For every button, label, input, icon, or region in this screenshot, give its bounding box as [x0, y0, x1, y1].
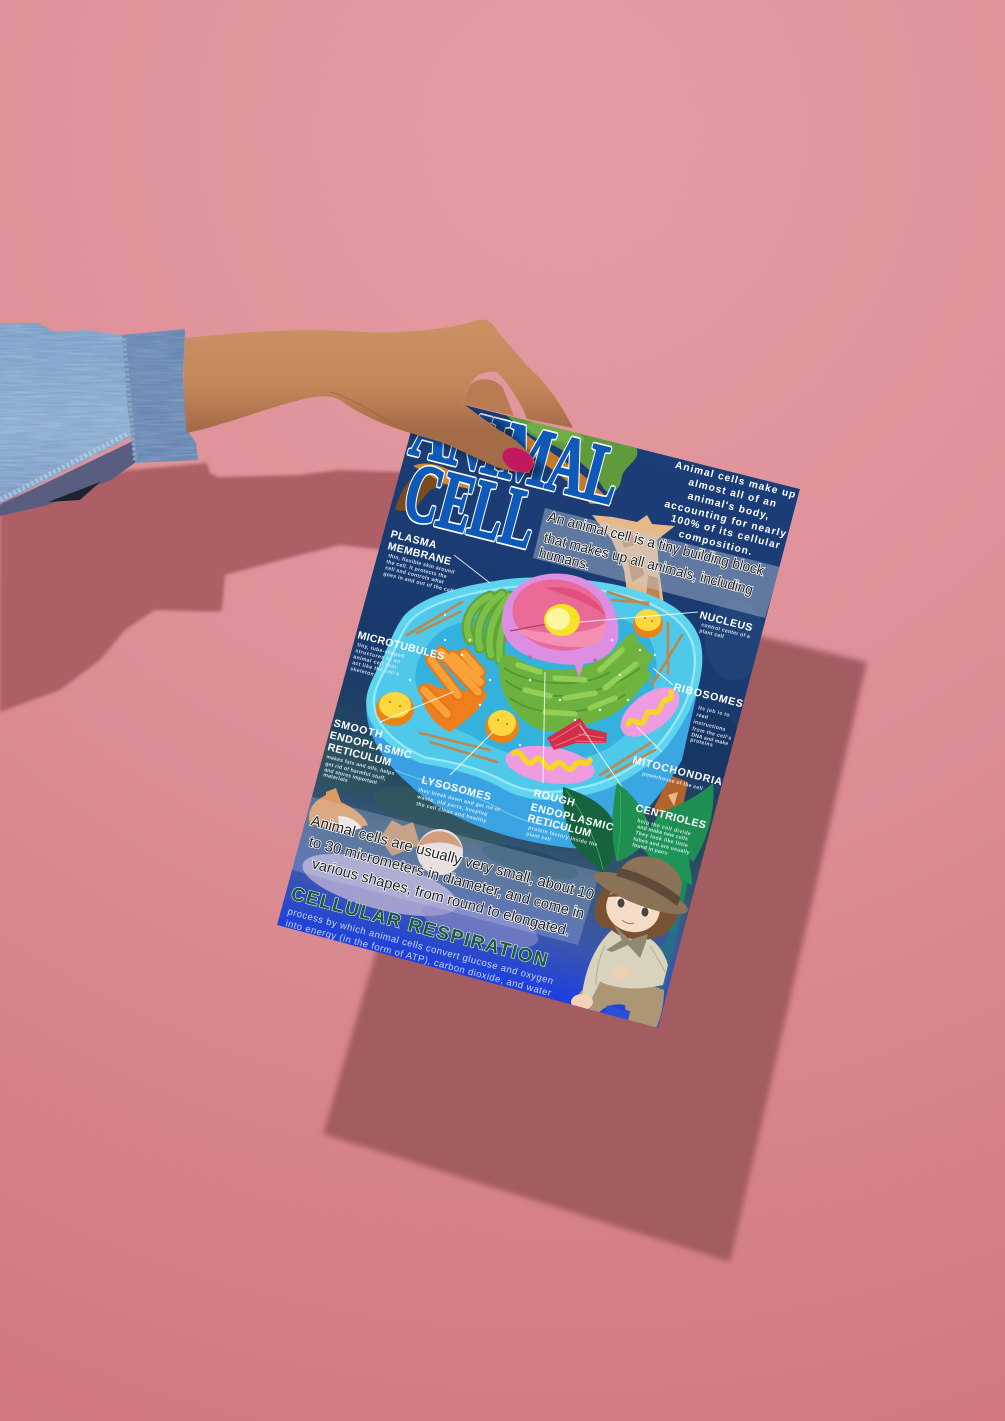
- microtubules: [407, 592, 682, 777]
- title word: animal: ANIMAL: [403, 382, 631, 522]
- big foreground leaves: [563, 783, 692, 885]
- cellular respiration description: process by which animal cells convert glucose and oxygen: [286, 906, 554, 987]
- label: ribosomes: [672, 681, 744, 749]
- label: plasma membrane: [382, 528, 455, 595]
- label: smooth endoplasmic reticulum: SMOOTH: [332, 717, 384, 741]
- label: rough endoplasmic reticulum: protein factory inside the: [527, 825, 598, 848]
- cytoplasm inner zone: [415, 609, 656, 760]
- mouth: [622, 920, 634, 924]
- hair: [595, 872, 679, 940]
- label: ribosomes: proteins: [689, 737, 713, 749]
- label: centrioles: They look like little: [634, 830, 689, 849]
- cell cytoplasm: [374, 586, 695, 792]
- label: rough endoplasmic reticulum: ROUGH: [532, 787, 576, 809]
- title word: animal: ANIMAL: [403, 382, 631, 522]
- title word: cell: CELL: [395, 445, 547, 566]
- title word: cell: CELL: [395, 445, 547, 566]
- hand shadow on title: [410, 410, 546, 481]
- cell body: [366, 577, 702, 848]
- text: animal cells make up: composition.: [677, 529, 754, 558]
- mitochondria: [506, 687, 680, 784]
- arm and thumb: [184, 320, 573, 473]
- title word: animal: [406, 413, 616, 506]
- fingernail: [498, 443, 538, 477]
- label: rough endoplasmic reticulum: RETICULUM: [526, 812, 593, 840]
- label: centrioles: tubes and are usually: [632, 836, 690, 856]
- label: mitochondria: MITOCHONDRIA: [631, 754, 724, 789]
- label: mitochondria: powerhouse of the cell: [641, 771, 704, 792]
- cell top surface rim: [366, 577, 702, 800]
- label: centrioles: and make new cells: [636, 824, 689, 843]
- label: smooth endoplasmic reticulum: RETICULUM: [326, 741, 393, 769]
- label: rough endoplasmic reticulum: ENDOPLASMIC: [529, 801, 615, 834]
- text: animal cells make up: [663, 460, 798, 558]
- label: ribosomes: DNA and make: [690, 732, 729, 747]
- label: centrioles: CENTRIOLES: [634, 802, 707, 832]
- text: animal cells make up: almost all of an: [687, 477, 778, 510]
- label: plasma membrane: thin, flexible skin around: [387, 553, 455, 576]
- label: smooth endoplasmic reticulum: [322, 717, 413, 786]
- hat crown: [620, 856, 682, 902]
- nucleus: [502, 571, 618, 678]
- label: lysosomes: LYSOSOMES: [420, 774, 492, 803]
- intro text: that makes up all animals, including: [542, 530, 755, 599]
- label: lysosomes: they break down and get rid of: [417, 787, 501, 814]
- tree with green canopy: [395, 414, 637, 512]
- label: microtubules: MICROTUBULES: [356, 629, 446, 663]
- label: plasma membrane: the cell. It protects the: [385, 559, 447, 580]
- girl explorer: [571, 856, 692, 1035]
- middle finger: [462, 379, 514, 416]
- intro text: An animal cell is a tiny building block: [546, 509, 766, 579]
- hat brim: [590, 864, 692, 922]
- lower body text: Animal cells are usually very small, about 10: [309, 812, 596, 904]
- label: lysosomes: the cell clean and healthy: [415, 801, 487, 825]
- label: ribosomes: from the cell's: [691, 726, 732, 742]
- arm shadow: [0, 463, 420, 712]
- intro text: humans.: [537, 545, 592, 574]
- giraffe: [592, 515, 675, 605]
- label: rough endoplasmic reticulum: [525, 787, 615, 848]
- neckerchief: [606, 925, 648, 958]
- rabbit: [309, 788, 368, 832]
- face: [601, 878, 665, 938]
- lysosomes: [376, 609, 663, 743]
- text: animal cells make up: 100% of its cellular: [670, 513, 782, 552]
- label: microtubules: [349, 629, 446, 678]
- label: centrioles: found in pairs: [631, 842, 668, 857]
- label: ribosomes: RIBOSOMES: [672, 681, 744, 710]
- label: centrioles: [631, 802, 707, 857]
- hamster: [417, 829, 463, 875]
- label: ribosomes: Its job is to: [697, 705, 730, 719]
- panel: lower translucent band: [285, 795, 600, 945]
- label: smooth endoplasmic reticulum: ENDOPLASMIC: [328, 729, 413, 762]
- sleeve: [0, 323, 198, 516]
- label: smooth endoplasmic reticulum: and stores important: [323, 767, 378, 786]
- band: intro text backing: [533, 508, 780, 618]
- nucleolus: [544, 604, 580, 636]
- sleeve cuff: [122, 329, 198, 463]
- eyes: [616, 896, 650, 917]
- second rabbit: [380, 820, 420, 856]
- poster shadow: [323, 612, 867, 1262]
- label: plasma membrane: PLASMA: [389, 528, 438, 551]
- label: plasma membrane: goes in and out of the cell: [382, 571, 454, 595]
- rough endoplasmic reticulum: [547, 718, 607, 750]
- lower body text: to 30 micrometers in diameter, and come in: [307, 833, 586, 923]
- label: ribosomes: instructions: [692, 719, 726, 733]
- sleeve body: [0, 323, 135, 504]
- label: smooth endoplasmic reticulum: materials: [322, 772, 348, 784]
- hand: [184, 320, 573, 477]
- label: microtubules: structures in an: [354, 648, 401, 665]
- heading: cellular respiration: CELLULAR RESPIRATION: [289, 884, 550, 971]
- sleeve dark underside: [0, 440, 136, 516]
- golgi apparatus: [422, 652, 487, 732]
- label: centrioles: help the cell divide: [636, 818, 691, 837]
- green endoplasmic reticulum, left fan: [467, 594, 514, 660]
- label: microtubules: tiny, tube-shaped: [356, 642, 405, 660]
- label: rough endoplasmic reticulum: plant cell: [525, 831, 552, 843]
- ribosome dots: [409, 614, 656, 746]
- text: animal cells make up: animal's body,: [686, 491, 771, 522]
- label: lysosomes: [415, 774, 501, 825]
- label: nucleus: NUCLEUS: [698, 609, 754, 634]
- label: plasma membrane: cell and controls what: [384, 565, 444, 586]
- jungle foliage backdrop: [312, 600, 765, 887]
- label: microtubules: animal cell that: [352, 654, 397, 671]
- poster paper background: [277, 394, 800, 1028]
- leaves and trunk behind girl: [654, 776, 714, 992]
- label: microtubules: skeleton: [349, 666, 374, 678]
- hands: [571, 994, 593, 1010]
- label: smooth endoplasmic reticulum: makes fats and oils, helps: [325, 754, 395, 777]
- title word: cell: [406, 464, 532, 550]
- animals and stumps: [297, 788, 543, 958]
- poster: [277, 382, 800, 1035]
- label: lysosomes: waste, old parts, keeping: [416, 794, 488, 818]
- label: ribosomes: read: [695, 712, 709, 721]
- label: nucleus: plant cell: [698, 628, 725, 640]
- label: plasma membrane: MEMBRANE: [386, 540, 452, 568]
- label: nucleus: control center of a: [700, 622, 751, 640]
- lower body text: various shapes, from round to elongated.: [310, 855, 572, 940]
- leader lines: [380, 555, 698, 803]
- cellular respiration description: into energy (in the form of ATP), carbon dioxide, and water: [284, 918, 552, 999]
- title: [406, 413, 616, 550]
- green endoplasmic reticulum, main stack: [499, 636, 649, 732]
- text: animal cells make up: accounting for nearly: [663, 499, 788, 540]
- legs: [575, 981, 664, 1035]
- label: smooth endoplasmic reticulum: get rid of harmful stuff,: [324, 761, 387, 782]
- label: microtubules: act like the cell's: [351, 660, 400, 678]
- shirt: [582, 930, 668, 998]
- text: animal cells make up: Animal cells make up: [674, 460, 798, 501]
